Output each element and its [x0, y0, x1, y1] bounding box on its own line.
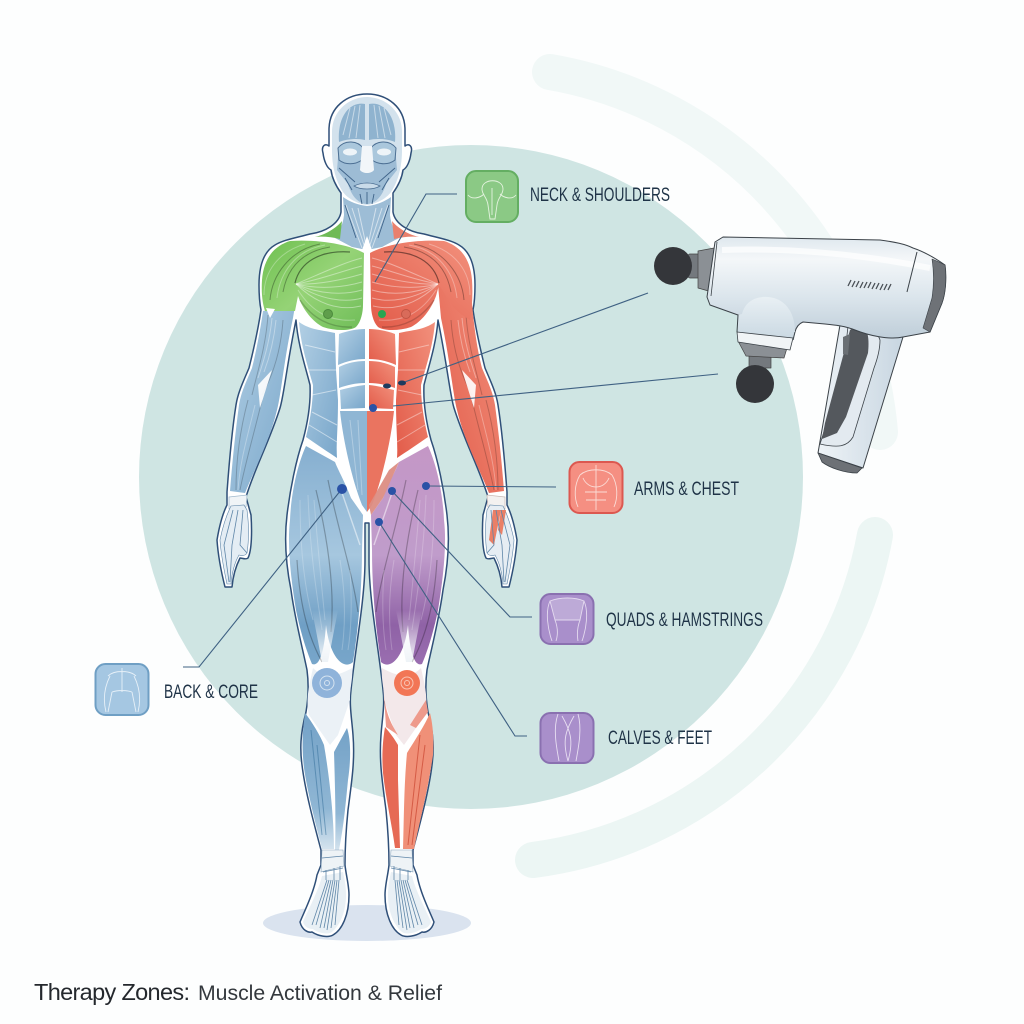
abdomen and side blue — [299, 322, 367, 512]
icon: quads and hamstrings — [540, 594, 594, 644]
zone: back and core — [96, 664, 258, 715]
gun body — [707, 237, 946, 338]
trapezius green — [315, 221, 342, 239]
left calf blue — [303, 713, 350, 850]
target dots — [337, 310, 430, 526]
trapezius red — [392, 221, 419, 239]
right arm red — [438, 285, 514, 584]
zone: arms and chest — [570, 462, 739, 513]
floor shadow — [263, 905, 471, 941]
left arm blue — [220, 300, 296, 584]
right knee — [382, 668, 428, 745]
label: neck and shoulders: NECK & SHOULDERS — [530, 185, 670, 206]
background circle — [139, 145, 803, 809]
label: arms and chest: ARMS & CHEST — [634, 479, 739, 500]
lower massage head — [736, 341, 787, 403]
neck muscles — [335, 197, 399, 250]
gun neck — [737, 297, 795, 350]
label: calves and feet: CALVES & FEET — [608, 728, 712, 749]
icon: back and core — [96, 664, 148, 715]
human muscle figure — [217, 94, 517, 936]
leader lines — [183, 194, 718, 736]
head muscles — [332, 97, 402, 205]
icon: calves and feet — [540, 713, 594, 763]
label: back and core: BACK & CORE — [164, 682, 258, 703]
feet and ankles — [303, 850, 431, 933]
gun grip — [818, 322, 903, 473]
upper massage head — [654, 247, 714, 292]
chest and shoulder green — [262, 241, 364, 330]
icon: arms and chest — [570, 462, 622, 513]
zone: quads and hamstrings — [540, 594, 763, 644]
icon: neck and shoulders — [466, 171, 518, 222]
lower decorative arc — [533, 535, 875, 860]
right thigh purple — [369, 446, 445, 665]
right calf red — [382, 713, 433, 849]
subtitle: Muscle Activation & Relief — [198, 982, 442, 1005]
label: quads and hamstrings: QUADS & HAMSTRINGS — [606, 610, 763, 631]
left knee — [308, 668, 352, 745]
zone: neck and shoulders — [466, 171, 670, 222]
chest and shoulder red — [370, 241, 472, 330]
upper decorative arc — [550, 72, 880, 432]
body silhouette — [217, 94, 517, 936]
left thigh blue — [289, 446, 363, 665]
abdomen and side red — [367, 322, 435, 512]
title: Therapy Zones: — [34, 979, 190, 1005]
zone: calves and feet — [540, 713, 712, 763]
massage gun — [654, 237, 946, 473]
